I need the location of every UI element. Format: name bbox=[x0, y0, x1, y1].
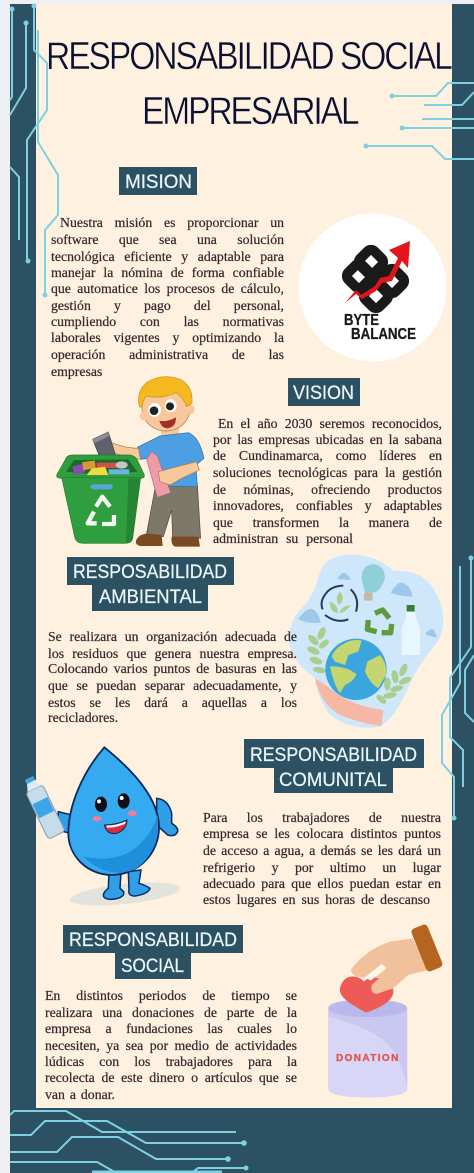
text block: responsabilidad social: lúdicas con los trabajadores para la bbox=[45, 1054, 297, 1069]
heading: responsabilidad comunital bbox=[244, 739, 424, 793]
heading: responsabilidad ambiental bbox=[67, 557, 234, 611]
text block: responsabilidad comunital: estos lugares en sus horas de descanso bbox=[203, 892, 430, 907]
text block: responsabilidad social: En distintos periodos de tiempo se bbox=[45, 988, 297, 1003]
text block: responsabilidad social bbox=[44, 988, 297, 1102]
text block: mision: Nuestra misión es proporcionar un bbox=[60, 215, 284, 230]
text block: vision: administran su personal bbox=[213, 531, 353, 546]
circuit lines: left bbox=[10, 4, 58, 298]
heading: responsabilidad ambiental: RESPOSABILIDAD bbox=[73, 561, 227, 583]
text block: responsabilidad comunital: de acceso a agua, a demás se les dará un bbox=[203, 843, 441, 858]
text block: mision: tecnológica eficiente y adaptable para bbox=[51, 249, 284, 264]
icon: boy recycling bbox=[57, 377, 204, 547]
text block: vision: En el año 2030 seremos reconocidos, bbox=[218, 416, 442, 431]
title bbox=[46, 34, 453, 133]
text block: mision: cumpliendo con las normativas bbox=[51, 314, 284, 329]
icon: byte balance logo: BALANCE bbox=[351, 326, 416, 343]
icon: byte balance logo bbox=[298, 214, 446, 362]
text block: responsabilidad comunital: refrigerio y por ultimo un lugar bbox=[203, 860, 441, 875]
heading: mision: MISION bbox=[125, 171, 192, 193]
heading: vision: VISION bbox=[293, 382, 354, 404]
text block: mision: laborales vigentes y optimizando la bbox=[51, 330, 284, 345]
text block: mision: que automatice los procesos de cálculo, bbox=[51, 281, 284, 296]
text block: mision: empresas bbox=[51, 364, 102, 379]
text block: vision: de nóminas, ofreciendo productos bbox=[213, 482, 442, 497]
text block: vision: soluciones tecnológicas para la gestión bbox=[213, 465, 442, 480]
text block: responsabilidad social: necesiten, ya sea por medio de actividades bbox=[45, 1038, 297, 1053]
heading: responsabilidad social: RESPONSABILIDAD bbox=[69, 929, 237, 951]
title: RESPONSABILIDAD SOCIAL bbox=[46, 34, 453, 78]
text block: responsabilidad social: empresa a fundaciones las cuales lo bbox=[45, 1021, 297, 1036]
heading: responsabilidad comunital: RESPONSABILIDAD bbox=[250, 744, 417, 766]
text block: responsabilidad ambiental: Se realizara un organización adecuada de bbox=[48, 629, 297, 644]
text block: vision: que transformen la manera de bbox=[213, 515, 442, 530]
text block: mision: software que sea una solución bbox=[51, 232, 284, 247]
icon: byte balance logo: BYTE bbox=[344, 312, 379, 329]
text block: responsabilidad ambiental: Colocando varios puntos de basuras en las bbox=[48, 661, 297, 676]
text block: vision: por las empresas ubicadas en la sabana bbox=[213, 432, 442, 447]
text block: responsabilidad comunital: adecuado para que ellos puedan estar en bbox=[203, 876, 441, 891]
heading: mision bbox=[119, 167, 197, 195]
icon: water drop mascot bbox=[20, 747, 181, 910]
circuit lines: top right bbox=[364, 83, 474, 159]
text block: responsabilidad ambiental: estos se les dará a aquellas a los bbox=[48, 695, 297, 710]
icon: earth and ecology blob bbox=[289, 554, 443, 728]
icon: donation jar bbox=[328, 923, 444, 1097]
heading: responsabilidad comunital: COMUNITAL bbox=[279, 769, 387, 791]
text block: mision bbox=[51, 215, 284, 380]
text block: responsabilidad social: realizara una donaciones de parte de la bbox=[45, 1005, 297, 1020]
heading: responsabilidad social bbox=[63, 925, 243, 979]
text block: responsabilidad comunital bbox=[203, 810, 441, 908]
title: EMPRESARIAL bbox=[142, 89, 360, 133]
text block: mision: operación administrativa de las bbox=[51, 347, 284, 362]
circuit lines: bottom bbox=[10, 1111, 248, 1172]
circuit lines: middle right bbox=[442, 556, 474, 820]
text block: responsabilidad social: van a donar. bbox=[45, 1087, 115, 1102]
text block: responsabilidad social: recolecta de este dinero o artículos que se bbox=[45, 1070, 297, 1085]
text block: responsabilidad ambiental: que se puedan separar adecuadamente, y bbox=[48, 678, 297, 693]
text block: responsabilidad comunital: Para los trabajadores de nuestra bbox=[203, 810, 441, 825]
text block: mision: gestión y pago del personal, bbox=[51, 298, 284, 313]
text block: mision: manejar la nómina de forma confiable bbox=[51, 265, 284, 280]
text block: vision: innovadores, confiables y adaptables bbox=[213, 498, 442, 513]
text block: responsabilidad comunital: empresa se les colocara distintos puntos bbox=[203, 826, 441, 841]
text block: vision bbox=[213, 416, 442, 546]
text block: responsabilidad ambiental: recicladores. bbox=[48, 710, 118, 725]
heading: responsabilidad ambiental: AMBIENTAL bbox=[99, 586, 202, 608]
text block: vision: de Cundinamarca, como líderes en bbox=[213, 448, 442, 463]
icon: donation jar: DONATION bbox=[336, 1053, 398, 1064]
text block: responsabilidad ambiental bbox=[48, 629, 298, 725]
heading: responsabilidad social: SOCIAL bbox=[121, 955, 184, 977]
text block: responsabilidad ambiental: los residuos que genera nuestra empresa. bbox=[48, 646, 297, 661]
